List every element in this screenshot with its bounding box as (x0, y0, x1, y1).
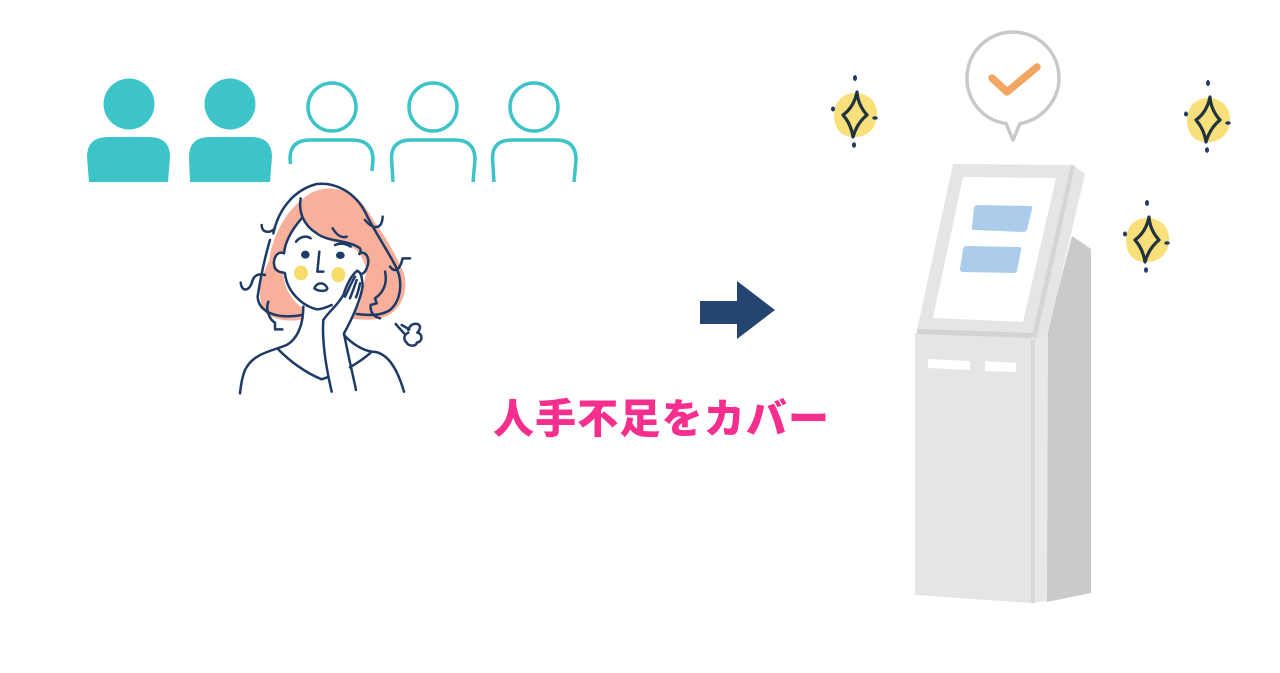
illustration: worried woman with hand on cheek (240, 184, 421, 393)
arrow (700, 281, 775, 339)
kiosk screen bezel (917, 164, 1085, 340)
check mark (992, 67, 1037, 92)
screen button 1 (972, 205, 1032, 232)
kiosk edge strips (1031, 333, 1035, 603)
icon: empty person 5 (492, 83, 576, 182)
kiosk screen (933, 177, 1056, 322)
hair, face and body line work (240, 184, 421, 393)
face, neck and shoulders (240, 218, 403, 393)
sparkle 3 (1123, 200, 1170, 273)
icon: filled person 2 (189, 78, 272, 182)
icon: filled person 1 (87, 78, 170, 182)
hair colour fill (260, 188, 405, 321)
eyes (301, 251, 345, 259)
sparkle 2 (1184, 80, 1231, 153)
icon: empty person 4 (392, 83, 475, 182)
kiosk rear side panel (1047, 236, 1091, 602)
headline: 人手不足をカバー (493, 396, 829, 442)
bubble outline (967, 32, 1059, 140)
kiosk lower body (915, 333, 1031, 603)
cheeks (294, 266, 345, 282)
sparkle 1 (831, 75, 878, 148)
speech bubble with check mark (967, 32, 1059, 140)
staffing row: two filled and three empty person icons (87, 78, 576, 182)
icon: empty person 3 (290, 83, 373, 171)
screen button 2 (960, 246, 1021, 273)
kiosk terminal (915, 164, 1091, 603)
kiosk ticket slots (928, 359, 970, 370)
bezel shade lines (1032, 165, 1075, 340)
